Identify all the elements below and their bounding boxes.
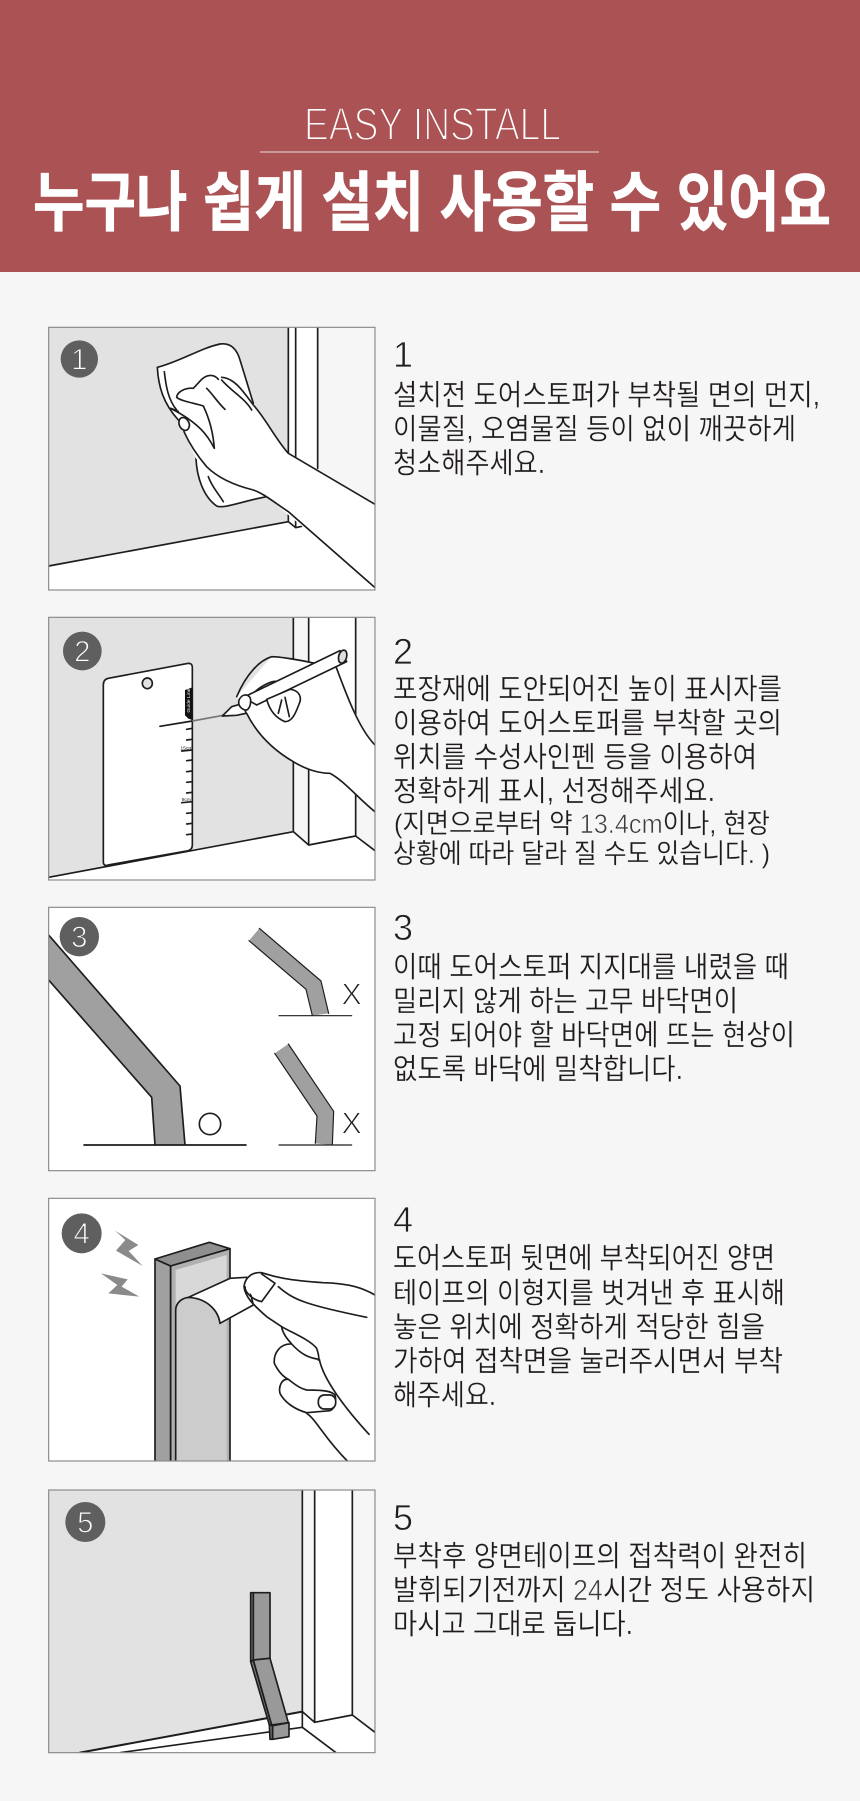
step 5 text: 발휘되기전까지 24시간 정도 사용하지 xyxy=(393,1574,815,1607)
step 4 text: 4 xyxy=(393,1199,413,1240)
step 1 text: 청소해주세요. xyxy=(393,448,545,480)
panel 4: peeling the tape xyxy=(49,1198,375,1462)
badge 5: 5 xyxy=(77,1506,93,1539)
step 4 text: 테이프의 이형지를 벗겨낸 후 표시해 xyxy=(393,1277,785,1310)
badge 4 xyxy=(62,1213,102,1253)
door stopper body xyxy=(155,1242,253,1462)
step 3 text: 고정 되어야 할 바닥면에 뜨는 현상이 xyxy=(393,1019,795,1052)
step 4 text: 놓은 위치에 정확하게 적당한 힘을 xyxy=(393,1311,765,1344)
wrong stopper: tilted forward: X xyxy=(341,1106,362,1140)
step 2 text xyxy=(393,631,782,869)
icon: hand with pen xyxy=(222,649,375,812)
step 2 text: 정확하게 표시, 선정해주세요. xyxy=(393,775,715,808)
badge 5 xyxy=(65,1502,105,1542)
step 3 text: 이때 도어스토퍼 지지대를 내렸을 때 xyxy=(393,951,789,984)
step 2 text: 포장재에 도안되어진 높이 표시자를 xyxy=(393,674,782,706)
step 5 text xyxy=(393,1497,815,1641)
step 2 text: (지면으로부터 약 13.4cm이나, 현장 xyxy=(394,809,770,839)
panel 3: correct and wrong floor contact xyxy=(49,907,375,1171)
step 1 text: 이물질, 오염물질 등이 없이 깨끗하게 xyxy=(393,413,796,446)
badge 2 xyxy=(63,632,102,670)
height guide card: 9cm xyxy=(182,797,191,803)
badge 3: 3 xyxy=(71,921,87,954)
panel 5: installed stopper xyxy=(49,1490,375,1753)
icon: bolts xyxy=(101,1231,143,1297)
step 1 text: 1 xyxy=(393,334,413,375)
step 2 text: 상황에 따라 달라 질 수도 있습니다. ) xyxy=(393,839,770,869)
step 5 text: 부착후 양면테이프의 접착력이 완전히 xyxy=(393,1540,807,1573)
panel 2: marking the height xyxy=(49,617,375,880)
step 4 text: 도어스토퍼 뒷면에 부착되어진 양면 xyxy=(393,1242,775,1275)
badge 2: 2 xyxy=(74,635,90,668)
step 3 text xyxy=(393,907,795,1086)
step 3 text: 없도록 바닥에 밀착합니다. xyxy=(393,1053,683,1086)
step 2 text: 이용하여 도어스토퍼를 부착할 곳의 xyxy=(393,707,782,740)
icon: hand xyxy=(171,375,375,588)
installed door stopper xyxy=(251,1593,289,1739)
step 1 text xyxy=(393,334,820,480)
step 5 text: 5 xyxy=(393,1497,413,1538)
badge 1: 1 xyxy=(71,343,87,376)
step 4 text xyxy=(393,1199,785,1412)
icon: cloth xyxy=(157,344,267,507)
step 5 text: 마시고 그대로 둡니다. xyxy=(393,1608,633,1641)
badge 4: 4 xyxy=(74,1218,90,1251)
step 4 text: 가하여 접착면을 눌러주시면서 부착 xyxy=(393,1345,783,1378)
subtitle: EASY INSTALL: EASY INSTALL xyxy=(304,98,561,150)
step 2 text: 위치를 수성사인펜 등을 이용하여 xyxy=(393,741,757,774)
step 3 text: 3 xyxy=(393,907,413,948)
height guide card: 15cm xyxy=(180,745,193,751)
step 3 text: 밀리지 않게 하는 고무 바닥면이 xyxy=(393,985,738,1018)
height guide card: Guide Line xyxy=(186,688,192,713)
wrong stopper: tilted back: X xyxy=(341,977,362,1011)
step 4 text: 해주세요. xyxy=(393,1380,496,1412)
wrong stopper: tilted back xyxy=(249,928,362,1016)
correct stopper xyxy=(49,935,246,1145)
step 2 text: 2 xyxy=(393,631,413,672)
badge 1 xyxy=(61,340,98,378)
panel 1: wiping the surface xyxy=(49,327,375,590)
height guide card xyxy=(103,663,223,865)
step 1 text: 설치전 도어스토퍼가 부착될 면의 먼지, xyxy=(393,379,820,412)
wrong stopper: tilted forward xyxy=(275,1044,362,1145)
header banner xyxy=(0,0,860,272)
icon: hand peeling xyxy=(244,1273,375,1461)
badge 3 xyxy=(60,917,99,956)
